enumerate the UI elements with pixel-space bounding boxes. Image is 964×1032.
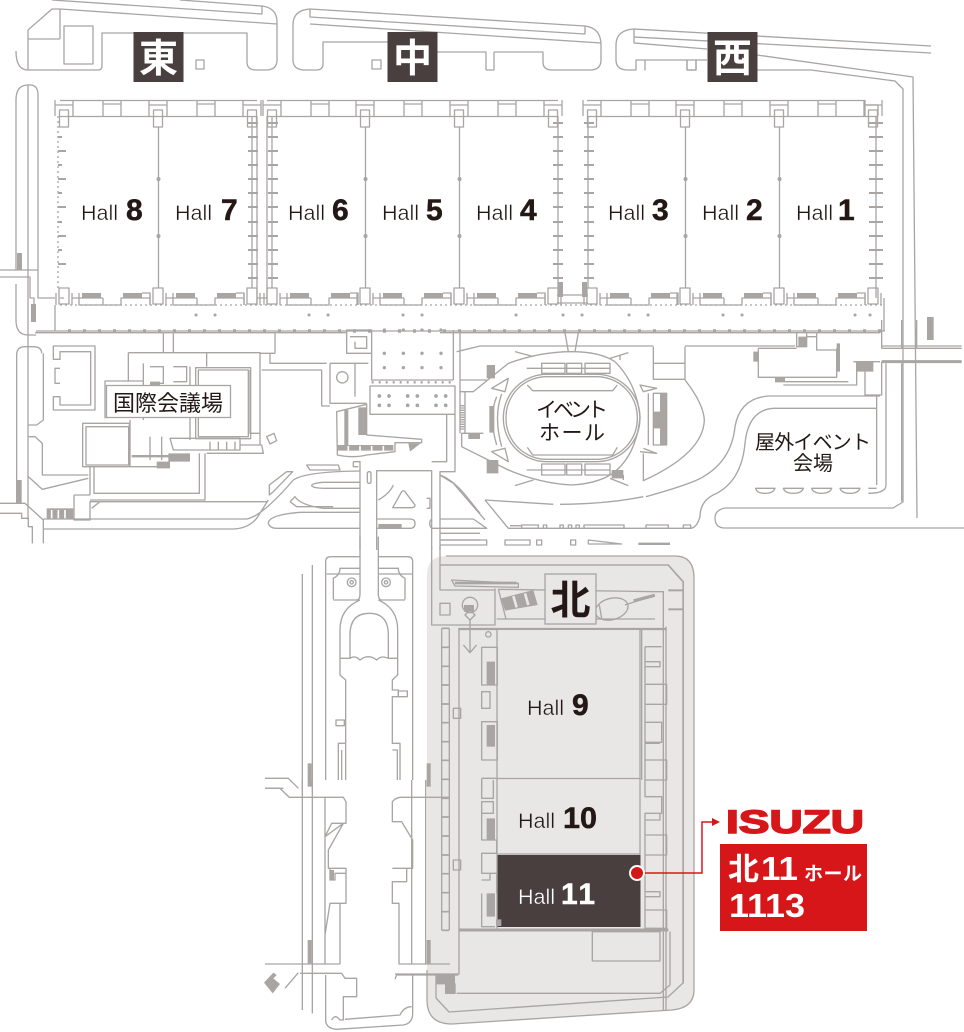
callout: booth number: ホール [804,859,862,886]
callout: booth number: 北 [728,852,759,887]
panel: north hall annex structures [432,547,683,983]
panel: left side road strip [0,85,55,520]
label: Hall 4: 4 [520,194,537,227]
panel: event hall arena structure [440,317,962,545]
label: Hall 2: 2 [746,194,763,227]
label: Hall 3: 3 [652,194,669,227]
label: event hall: ホール [539,417,605,447]
label: Hall 8: Hall [81,202,118,225]
logo: ISUZU: ISUZU [726,804,864,840]
heading: west zone 西 [708,32,758,82]
panel: station building lower part [264,780,458,1029]
heading: north zone 北: 北 [550,579,590,623]
label: event hall [536,394,608,447]
label: Hall 6: 6 [332,194,349,227]
heading: east zone 東: 東 [139,38,178,81]
heading: centre zone 中 [388,32,438,82]
panel: north hall area background [427,556,694,1024]
label: Hall 10 [518,802,597,835]
label: Hall 4 [476,194,537,227]
label: Hall 1 [796,194,855,227]
label: outdoor event venue: 屋外イベント [755,426,871,455]
label: Hall 11 [518,878,595,911]
panel: international conference centre buildings [0,333,360,543]
panel: east, centre and west exhibition hall frames [55,100,884,331]
panel: roads north of the halls [16,0,964,528]
label: Hall 6 [288,194,349,227]
label: Hall 7: 7 [221,194,238,227]
label: Hall 8 [81,194,143,227]
label: Hall 5: 5 [426,194,443,227]
label: Hall 8: 8 [126,194,143,227]
label: Hall 3 [608,194,669,227]
label: outdoor event venue [755,426,871,476]
heading: west zone 西: 西 [713,38,752,81]
label: Hall 2: Hall [702,202,739,225]
label: Hall 6: Hall [288,202,325,225]
callout: booth number: 1113 [729,887,805,924]
heading: east zone 東 [134,32,184,82]
label: outdoor event venue: 会場 [793,447,833,476]
label: Hall 9 [527,689,589,722]
panel: station building upper part [265,537,431,790]
heading: centre zone 中: 中 [393,38,432,81]
callout: booth number [720,844,867,931]
label: Hall 10: Hall [518,810,555,833]
heading: north zone 北 [545,574,596,624]
panel: hall 9, 10 and 11 rooms [497,630,640,930]
panel: main concourse corridor [36,315,885,331]
label: Hall 7 [175,194,238,227]
label: Hall 2 [702,194,763,227]
label: Hall 1: Hall [796,202,833,225]
label: event hall: イベント [536,394,608,424]
label: Hall 4: Hall [476,202,513,225]
label: Hall 7: Hall [175,202,212,225]
label: Hall 11: Hall [518,886,555,909]
label: Hall 9: Hall [527,697,564,720]
panel: service rooms beside north halls [482,627,667,1010]
label: Hall 3: Hall [608,202,645,225]
label: Hall 10: 10 [563,802,597,835]
callout: booth number: 11 [761,850,798,887]
panel: central plaza and bridge [330,330,480,550]
label: international conference centre: 国際会議場 [113,386,223,418]
label: Hall 5 [382,194,443,227]
panel: service rooms and plaza south of hall 11 [395,780,670,994]
callout: connector line from Hall 11 to ISUZU [630,818,720,880]
label: Hall 5: Hall [382,202,419,225]
label: Hall 9: 9 [572,689,589,722]
label: Hall 11: 11 [561,878,595,911]
label: Hall 1: 1 [838,194,855,227]
